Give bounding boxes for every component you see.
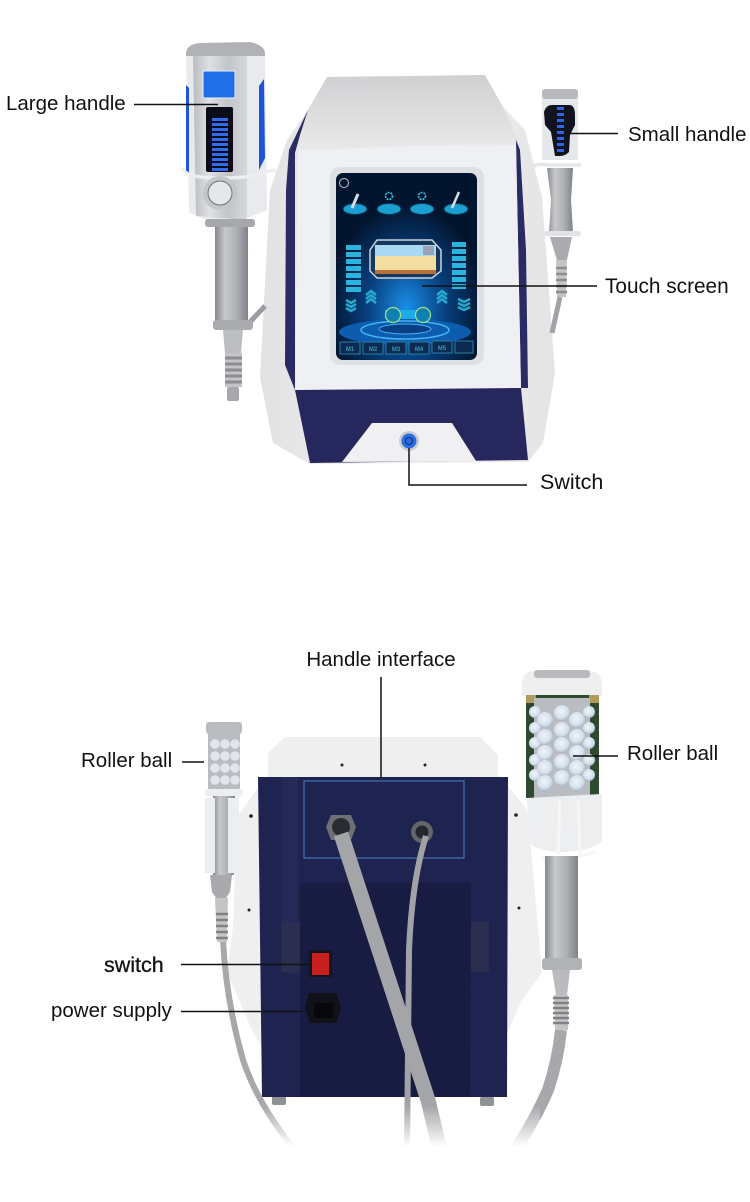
base white switch plate bbox=[342, 423, 476, 462]
holder ring bbox=[534, 164, 581, 167]
left level bars bbox=[346, 245, 361, 292]
label: switch bbox=[409, 448, 603, 494]
navy base bbox=[295, 388, 528, 463]
strain relief bbox=[556, 260, 567, 297]
right white side bbox=[495, 786, 542, 1033]
collar bbox=[205, 219, 255, 227]
cable bbox=[223, 940, 295, 1150]
back icon bbox=[340, 178, 348, 188]
power button bbox=[399, 431, 419, 451]
navy rear panel bbox=[258, 777, 508, 1097]
mode buttons: M3 bbox=[392, 347, 401, 353]
power socket bbox=[305, 993, 341, 1023]
head bbox=[542, 89, 578, 99]
label: switch rear: switch bbox=[104, 953, 164, 977]
red rocker switch bbox=[309, 950, 332, 977]
white cup bbox=[527, 794, 602, 852]
handle interface box bbox=[304, 781, 464, 858]
roller balls bbox=[529, 705, 595, 791]
head cap bbox=[522, 671, 602, 696]
cable bbox=[515, 1030, 561, 1150]
side lights bbox=[186, 79, 265, 176]
front white face bbox=[295, 145, 521, 390]
inner cylinder bbox=[534, 698, 590, 798]
collar bbox=[205, 789, 243, 796]
holder ring bbox=[183, 168, 276, 178]
black light panel bbox=[544, 105, 575, 156]
small handle front bbox=[534, 89, 581, 333]
right level bars bbox=[452, 242, 466, 289]
label: roller ball left: Roller ball bbox=[81, 749, 172, 772]
center metal panel bbox=[193, 56, 247, 220]
lower ring bbox=[544, 231, 581, 236]
holder clips bbox=[542, 800, 596, 859]
head cap bbox=[186, 42, 265, 56]
taper bbox=[550, 237, 572, 260]
label: handle interface: Handle interface bbox=[306, 648, 456, 671]
strain relief bbox=[215, 898, 228, 942]
large connector bbox=[326, 815, 356, 840]
mode buttons: M1 bbox=[346, 347, 355, 353]
play controls glow bbox=[339, 308, 471, 345]
navy side trim bbox=[285, 107, 528, 390]
spring bbox=[553, 998, 569, 1023]
left white side bbox=[227, 788, 275, 1048]
spring bbox=[216, 914, 228, 938]
lower bulge bbox=[210, 875, 232, 898]
label: small handle: Small handle bbox=[628, 123, 747, 146]
mode buttons: M4 bbox=[415, 347, 424, 353]
rear device bbox=[227, 737, 542, 1150]
label: roller ball right: Roller ball bbox=[627, 742, 718, 765]
white back shell bbox=[268, 737, 498, 780]
mode buttons: M5 bbox=[438, 346, 447, 352]
small connector bbox=[411, 821, 433, 843]
cable bbox=[552, 297, 560, 333]
handle body bbox=[186, 52, 267, 222]
screw dots bbox=[248, 764, 520, 912]
large handle front bbox=[183, 42, 276, 401]
shaft bbox=[213, 796, 235, 875]
tan corners bbox=[526, 695, 599, 703]
strain relief bbox=[223, 330, 243, 353]
head cap bbox=[206, 722, 242, 734]
screen bezel bbox=[330, 167, 484, 365]
darker recess bbox=[300, 883, 471, 1097]
mode buttons: M2 bbox=[369, 347, 378, 353]
strain relief bbox=[552, 970, 570, 995]
shaft bbox=[547, 168, 573, 232]
body bbox=[542, 98, 578, 160]
roller handle small bbox=[205, 722, 295, 1150]
rear large cable bbox=[341, 834, 440, 1150]
center display bbox=[370, 240, 441, 278]
feet bbox=[272, 1096, 494, 1106]
blue leds bbox=[557, 107, 564, 152]
chevrons bbox=[346, 291, 470, 311]
roller handle large bbox=[515, 670, 602, 1150]
collar bbox=[542, 958, 582, 970]
mode icon tops bbox=[352, 192, 459, 208]
label: large handle: Large handle bbox=[6, 92, 126, 115]
shaft bbox=[215, 226, 248, 322]
left side facet bbox=[281, 777, 298, 975]
label: power supply: power supply bbox=[51, 999, 173, 1022]
light strip bbox=[206, 107, 233, 172]
device body shell bbox=[260, 75, 555, 464]
shaft bbox=[545, 856, 578, 960]
roller window bbox=[526, 695, 599, 798]
cable bbox=[250, 306, 265, 322]
blue display bbox=[203, 71, 235, 98]
roller balls panel bbox=[208, 733, 240, 790]
mode buttons bbox=[340, 341, 473, 354]
label: switch: Switch bbox=[540, 470, 603, 494]
cable fade bbox=[200, 1105, 540, 1155]
balls bbox=[210, 739, 240, 785]
lower side facets bbox=[282, 922, 489, 972]
mode icons row bbox=[343, 204, 468, 214]
device top cover bbox=[295, 75, 517, 150]
rear small cable bbox=[407, 836, 426, 1150]
label: touch screen: Touch screen bbox=[605, 275, 729, 298]
holder clips bbox=[205, 798, 239, 873]
round button bbox=[203, 176, 237, 210]
front device bbox=[260, 75, 555, 464]
touch screen bbox=[336, 173, 477, 360]
